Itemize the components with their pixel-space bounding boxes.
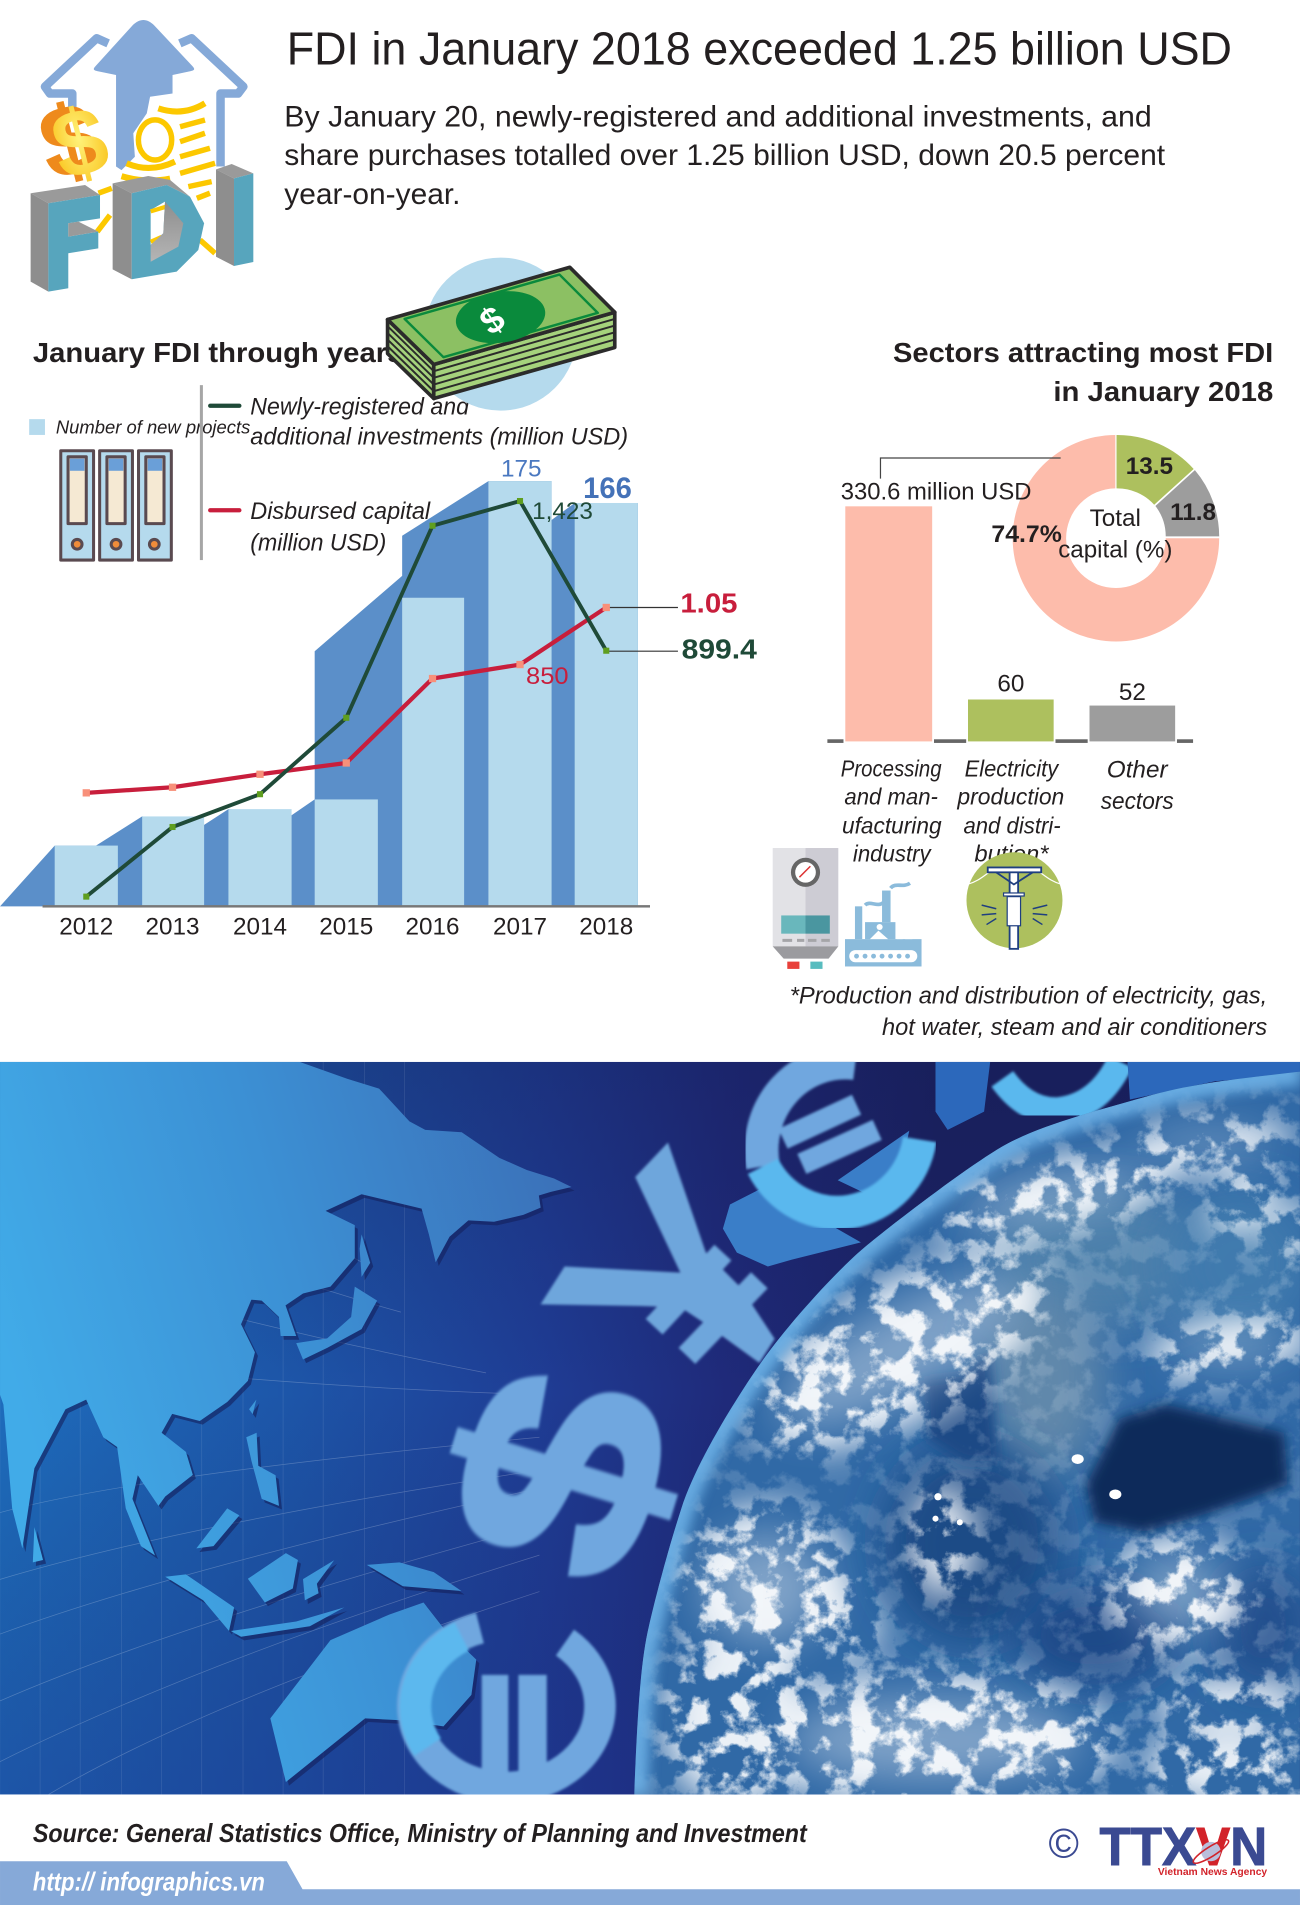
callout: 330.6 million USD: 330.6 million USD — [841, 478, 1031, 505]
icon: gold dollar sign: $ — [42, 85, 118, 201]
footnote — [790, 983, 1267, 1041]
bar and line chart: 1,423 — [532, 498, 593, 525]
text block: intro — [284, 101, 1165, 211]
legend: disbursed capital — [210, 498, 431, 556]
footnote: hot water, steam and air conditioners — [882, 1014, 1267, 1041]
icon: central up arrow — [94, 20, 194, 170]
label: electricity production and distribution: bution* — [974, 840, 1050, 866]
icon: factory — [845, 883, 922, 966]
axis — [827, 739, 1193, 743]
bars: number of new projects — [55, 481, 638, 906]
bar and line chart — [0, 455, 757, 940]
title: FDI in January 2018 exceeded 1.25 billion USD — [287, 22, 1232, 74]
map: Asia and islands — [0, 1062, 572, 1782]
legend: disbursed capital: Disbursed capital — [250, 498, 431, 525]
heading: sectors attracting most FDI: in January 2018 — [1053, 376, 1273, 407]
sea gradient — [0, 1062, 1300, 1794]
bar and line chart: 1.05 — [680, 587, 737, 618]
legend: newly-registered investments: additional investments (million USD) — [250, 424, 628, 451]
year labels: 2014 — [233, 913, 287, 940]
bar: electricity — [967, 699, 1055, 742]
logo: TTXVN — [1048, 1818, 1267, 1878]
sector bar chart: 52 — [1119, 679, 1146, 706]
bar and line chart: 166 — [583, 473, 632, 505]
footer link: http:// infographics.vn — [33, 1868, 265, 1896]
year labels: 2018 — [579, 913, 633, 940]
text block: intro: By January 20, newly-registered and additional investments, and — [284, 101, 1152, 133]
year labels: 2012 — [59, 913, 113, 940]
dollar symbol on note: $ — [472, 298, 512, 343]
icon: electricity pylon — [966, 852, 1062, 949]
copyright mark: © — [1048, 1821, 1079, 1867]
icon: dollar symbol: $ — [387, 1338, 734, 1609]
icon: gold dollar sign: $ — [30, 81, 109, 200]
axis — [43, 905, 650, 908]
icon: outlined side arrows — [45, 38, 243, 166]
icon: binders — [61, 451, 171, 560]
lead lines — [606, 607, 678, 651]
icon: euro symbol top — [761, 1062, 920, 1213]
icon: letter I — [216, 164, 253, 266]
bar and line chart: 850 — [526, 663, 569, 690]
value labels: 175 — [501, 455, 541, 482]
icon: letter F — [31, 185, 100, 292]
bright cloud specks — [932, 1454, 1121, 1525]
label: processing and manufacturing: and man- — [844, 783, 938, 809]
year labels: 2015 — [319, 913, 373, 940]
atmosphere limb — [634, 1072, 1300, 1794]
legend: newly-registered investments: Newly-registered and — [250, 393, 470, 420]
label: electricity production and distribution: Electricity — [965, 755, 1060, 781]
icon: letter D — [113, 176, 204, 279]
legend: disbursed capital: (million USD) — [250, 529, 386, 556]
year labels — [59, 913, 633, 940]
land fragment behind arc — [936, 1062, 1300, 1130]
bar: processing and manufacturing — [844, 505, 933, 742]
circle behind money — [424, 258, 577, 411]
agency name: Vietnam News Agency — [1158, 1867, 1267, 1878]
footer bar — [0, 1861, 1300, 1905]
label: processing and manufacturing: industry — [853, 840, 932, 866]
globe — [607, 1062, 1300, 1794]
land and ocean tones — [988, 1192, 1219, 1325]
label: electricity production and distribution — [956, 755, 1064, 866]
source: Source: General Statistics Office, Ministry of Planning and Investment — [33, 1820, 808, 1848]
donut chart: total capital share: Total — [1090, 505, 1141, 532]
slice: 74.7 percent — [1013, 435, 1219, 641]
globe and orbit — [1201, 1842, 1221, 1861]
donut labels: 13.5 — [1126, 453, 1173, 480]
callout: 330.6 million USD — [841, 458, 1061, 505]
bar: other sectors — [1089, 705, 1176, 742]
legend: number of new projects: Number of new projects — [56, 417, 251, 438]
text block: intro: share purchases totalled over 1.25 billion USD, down 20.5 percent — [284, 140, 1165, 172]
heading: sectors attracting most FDI: Sectors attracting most FDI — [893, 337, 1273, 368]
donut chart: total capital share: capital (%) — [1058, 537, 1172, 564]
heading: sectors attracting most FDI — [893, 337, 1273, 407]
dark ocean patch — [1086, 1404, 1288, 1532]
bar and line chart: 899.4 — [682, 633, 757, 664]
slice: 13.5 percent — [1117, 435, 1194, 505]
label: other sectors: sectors — [1101, 788, 1174, 815]
icon: FDI logo with arrows and coins — [30, 20, 253, 292]
slice: 11.8 percent — [1155, 470, 1219, 536]
legend divider — [200, 385, 203, 560]
soft cloud brightness — [705, 1132, 1290, 1781]
cloud texture — [607, 1062, 1300, 1794]
footnote: *Production and distribution of electricity, gas, — [790, 983, 1267, 1010]
icon: currency arc top right — [1002, 1062, 1120, 1111]
year labels: 2013 — [146, 913, 200, 940]
label: processing and manufacturing: ufacturing — [842, 812, 942, 838]
icon: yen symbol — [541, 1143, 775, 1363]
heading: January FDI through years: January FDI through years — [33, 337, 403, 368]
icon: euro symbol bottom — [413, 1628, 600, 1796]
text block: intro: year-on-year. — [284, 179, 460, 211]
label: other sectors: Other — [1107, 757, 1168, 784]
label: processing and manufacturing — [841, 755, 942, 866]
year labels: 2017 — [493, 913, 547, 940]
label: processing and manufacturing: Processing — [841, 755, 942, 781]
line: newly-registered investments — [83, 498, 609, 900]
map grid — [0, 1062, 539, 1794]
donut chart: total capital share: 74.7% — [991, 521, 1062, 548]
line: disbursed capital — [83, 604, 610, 797]
icon: money stack with circle — [388, 258, 615, 411]
map: coast shadow — [23, 1188, 574, 1786]
label: electricity production and distribution: production — [956, 783, 1064, 809]
donut chart: total capital share: 11.8 — [1170, 499, 1216, 526]
wordmark: TTXVN — [1100, 1818, 1267, 1877]
label: electricity production and distribution: and distri- — [963, 812, 1061, 838]
icon: coin stack — [97, 103, 215, 253]
sector bar chart — [827, 505, 1193, 743]
banknote stack — [388, 267, 615, 398]
icon: boiler — [773, 848, 838, 969]
legend: newly-registered investments — [210, 393, 628, 451]
map: North America fragment — [723, 1131, 909, 1267]
value labels: 60 — [997, 670, 1024, 697]
donut chart: total capital share — [991, 435, 1219, 641]
photo: world map, currency symbols and globe — [0, 1062, 1300, 1796]
label: other sectors — [1101, 757, 1174, 815]
year labels: 2016 — [406, 913, 460, 940]
dark blue stepped area — [0, 481, 638, 906]
